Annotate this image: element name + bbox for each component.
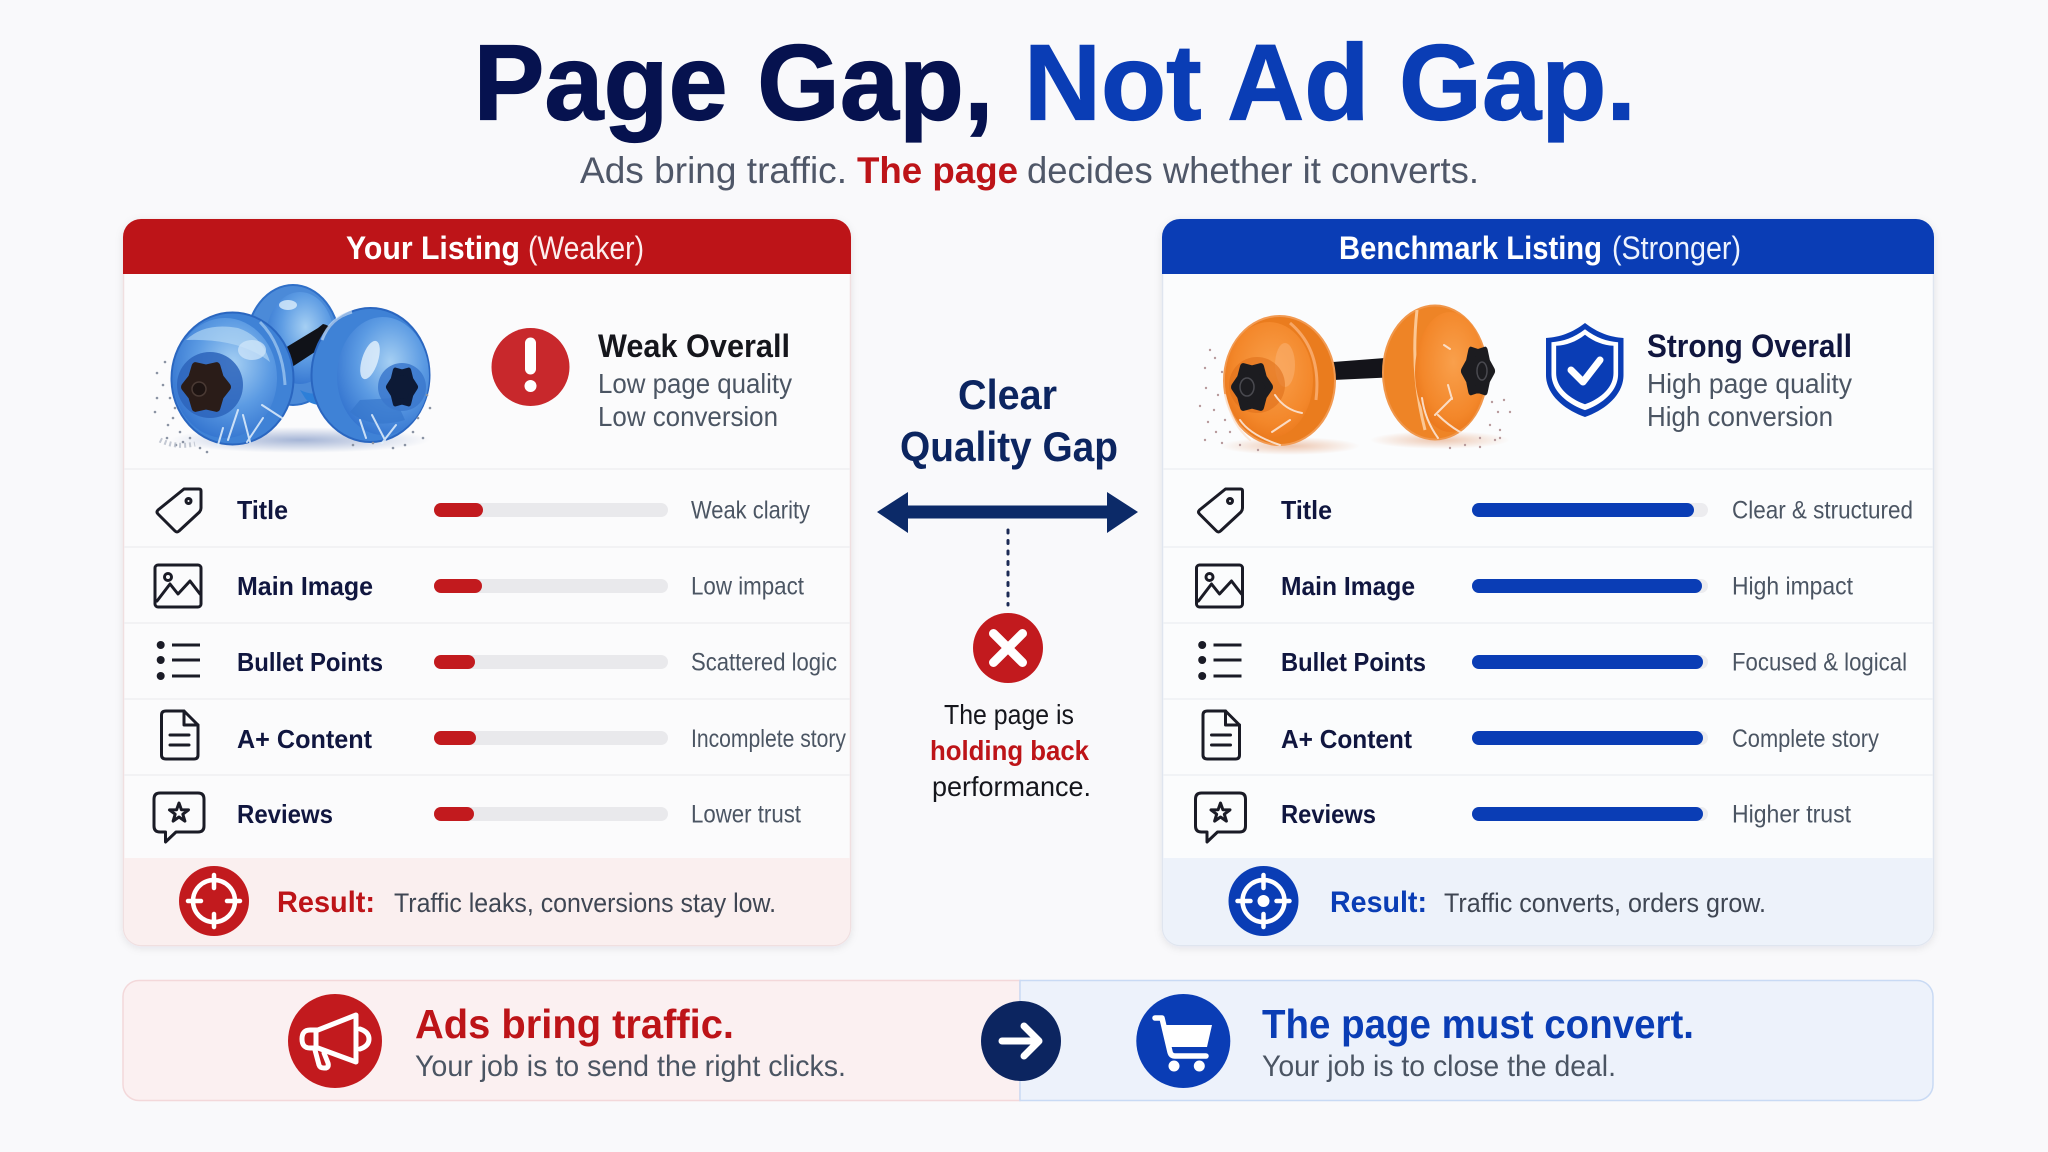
- icon: list: [1198, 641, 1242, 680]
- row: title: Weak clarity: [691, 496, 810, 524]
- panel: benchmark listing: [1162, 219, 1934, 946]
- status text: weak overall: Low page quality: [598, 368, 792, 399]
- title: Not Ad Gap.: [1024, 22, 1636, 142]
- row: reviews: Higher trust: [1732, 800, 1851, 828]
- subtitle: decides whether it converts.: [1027, 150, 1479, 191]
- icon: tag: [1198, 489, 1242, 532]
- callout text: The page is: [944, 699, 1074, 730]
- row: reviews: Reviews: [1281, 799, 1376, 829]
- subtitle: Ads bring traffic.: [580, 150, 847, 191]
- text: the page must convert: The page must convert.: [1262, 1001, 1694, 1047]
- result bar: strong: [1163, 858, 1933, 945]
- heading: clear quality gap: [900, 371, 1118, 470]
- panel header: benchmark listing: Benchmark Listing: [1339, 230, 1602, 266]
- title: Page Gap,: [474, 22, 994, 142]
- bottom banner: [123, 980, 1933, 1100]
- row: bullet points: Focused & logical: [1732, 648, 1907, 676]
- icon: review bubble: [154, 793, 204, 842]
- heading: clear quality gap: Quality Gap: [900, 423, 1118, 470]
- row: reviews: Reviews: [237, 799, 333, 829]
- icon: red alert: [492, 328, 570, 406]
- icon: tag: [157, 489, 201, 532]
- subtitle: [580, 150, 1479, 191]
- double arrow: [877, 492, 1138, 533]
- product image: blue water dumbbell: [155, 285, 430, 453]
- icon: red target: [179, 866, 249, 936]
- panel header: your listing: [123, 219, 851, 274]
- row: title: Clear & structured: [1732, 496, 1913, 524]
- result bar: weak: Result:: [277, 886, 375, 919]
- callout text: [930, 699, 1091, 802]
- row: reviews: [1196, 793, 1851, 842]
- subtitle: The page: [857, 150, 1018, 191]
- row: main image: High impact: [1732, 572, 1853, 600]
- status text: weak overall: Low conversion: [598, 401, 778, 432]
- status text: strong overall: Strong Overall: [1647, 328, 1852, 364]
- icon: blue target: [1228, 866, 1298, 936]
- icon: arrow circle: [981, 1001, 1061, 1081]
- result bar: strong: Traffic converts, orders grow.: [1444, 888, 1766, 918]
- row: a+ content: [162, 711, 846, 759]
- row: title: [1198, 489, 1913, 532]
- text: ads bring traffic: [415, 1001, 846, 1083]
- status text: weak overall: [598, 328, 792, 432]
- text: ads bring traffic: Ads bring traffic.: [415, 1001, 734, 1047]
- row: a+ content: Complete story: [1732, 725, 1879, 753]
- row: a+ content: Incomplete story: [691, 725, 846, 753]
- icon: red x: [973, 613, 1043, 683]
- product image: orange water dumbbell: [1200, 306, 1510, 455]
- icon: shield: [1546, 323, 1624, 417]
- text: the page must convert: Your job is to close the deal.: [1262, 1050, 1616, 1083]
- status text: weak overall: Weak Overall: [598, 328, 790, 364]
- row: bullet points: Scattered logic: [691, 648, 837, 676]
- row: reviews: [154, 793, 801, 842]
- row: main image: Main Image: [1281, 571, 1415, 601]
- row: main image: Low impact: [691, 572, 804, 600]
- row: main image: [1196, 565, 1853, 607]
- text: ads bring traffic: Your job is to send the right clicks.: [415, 1050, 846, 1083]
- row: bullet points: Bullet Points: [237, 647, 383, 677]
- panel header: benchmark listing: [1162, 219, 1934, 274]
- status text: strong overall: High page quality: [1647, 368, 1852, 399]
- row: title: Title: [237, 495, 288, 525]
- panel header: your listing: Your Listing: [346, 230, 520, 266]
- status text: strong overall: High conversion: [1647, 401, 1833, 432]
- status text: strong overall: [1647, 328, 1852, 432]
- panel header: benchmark listing: (Stronger): [1612, 230, 1741, 266]
- row: title: Title: [1281, 495, 1332, 525]
- panel: your listing: [123, 219, 851, 946]
- title: [474, 22, 1636, 142]
- row: a+ content: [1203, 711, 1879, 759]
- row: a+ content: A+ Content: [237, 724, 372, 754]
- icon: cart: [1136, 994, 1230, 1088]
- result bar: weak: [124, 858, 850, 945]
- row: title: [157, 489, 810, 532]
- center gap callout: [877, 371, 1138, 802]
- row: a+ content: A+ Content: [1281, 724, 1412, 754]
- icon: list: [157, 641, 200, 680]
- row: main image: Main Image: [237, 571, 373, 601]
- callout text: performance.: [932, 771, 1091, 802]
- text: the page must convert: [1262, 1001, 1694, 1083]
- panel header: your listing: (Weaker): [528, 230, 644, 266]
- row: bullet points: [157, 641, 837, 680]
- icon: document: [1203, 711, 1240, 759]
- icon: review bubble: [1196, 793, 1246, 842]
- icon: megaphone: [288, 994, 382, 1088]
- icon: document: [162, 711, 198, 759]
- icon: image: [155, 565, 201, 607]
- icon: image: [1196, 565, 1242, 607]
- row: main image: [155, 565, 804, 607]
- row: reviews: Lower trust: [691, 800, 801, 828]
- row: bullet points: Bullet Points: [1281, 647, 1426, 677]
- result bar: strong: Result:: [1330, 886, 1427, 919]
- row: bullet points: [1198, 641, 1907, 680]
- result bar: weak: Traffic leaks, conversions stay low.: [394, 888, 776, 918]
- heading: clear quality gap: Clear: [958, 371, 1057, 418]
- callout text: holding back: [930, 735, 1089, 766]
